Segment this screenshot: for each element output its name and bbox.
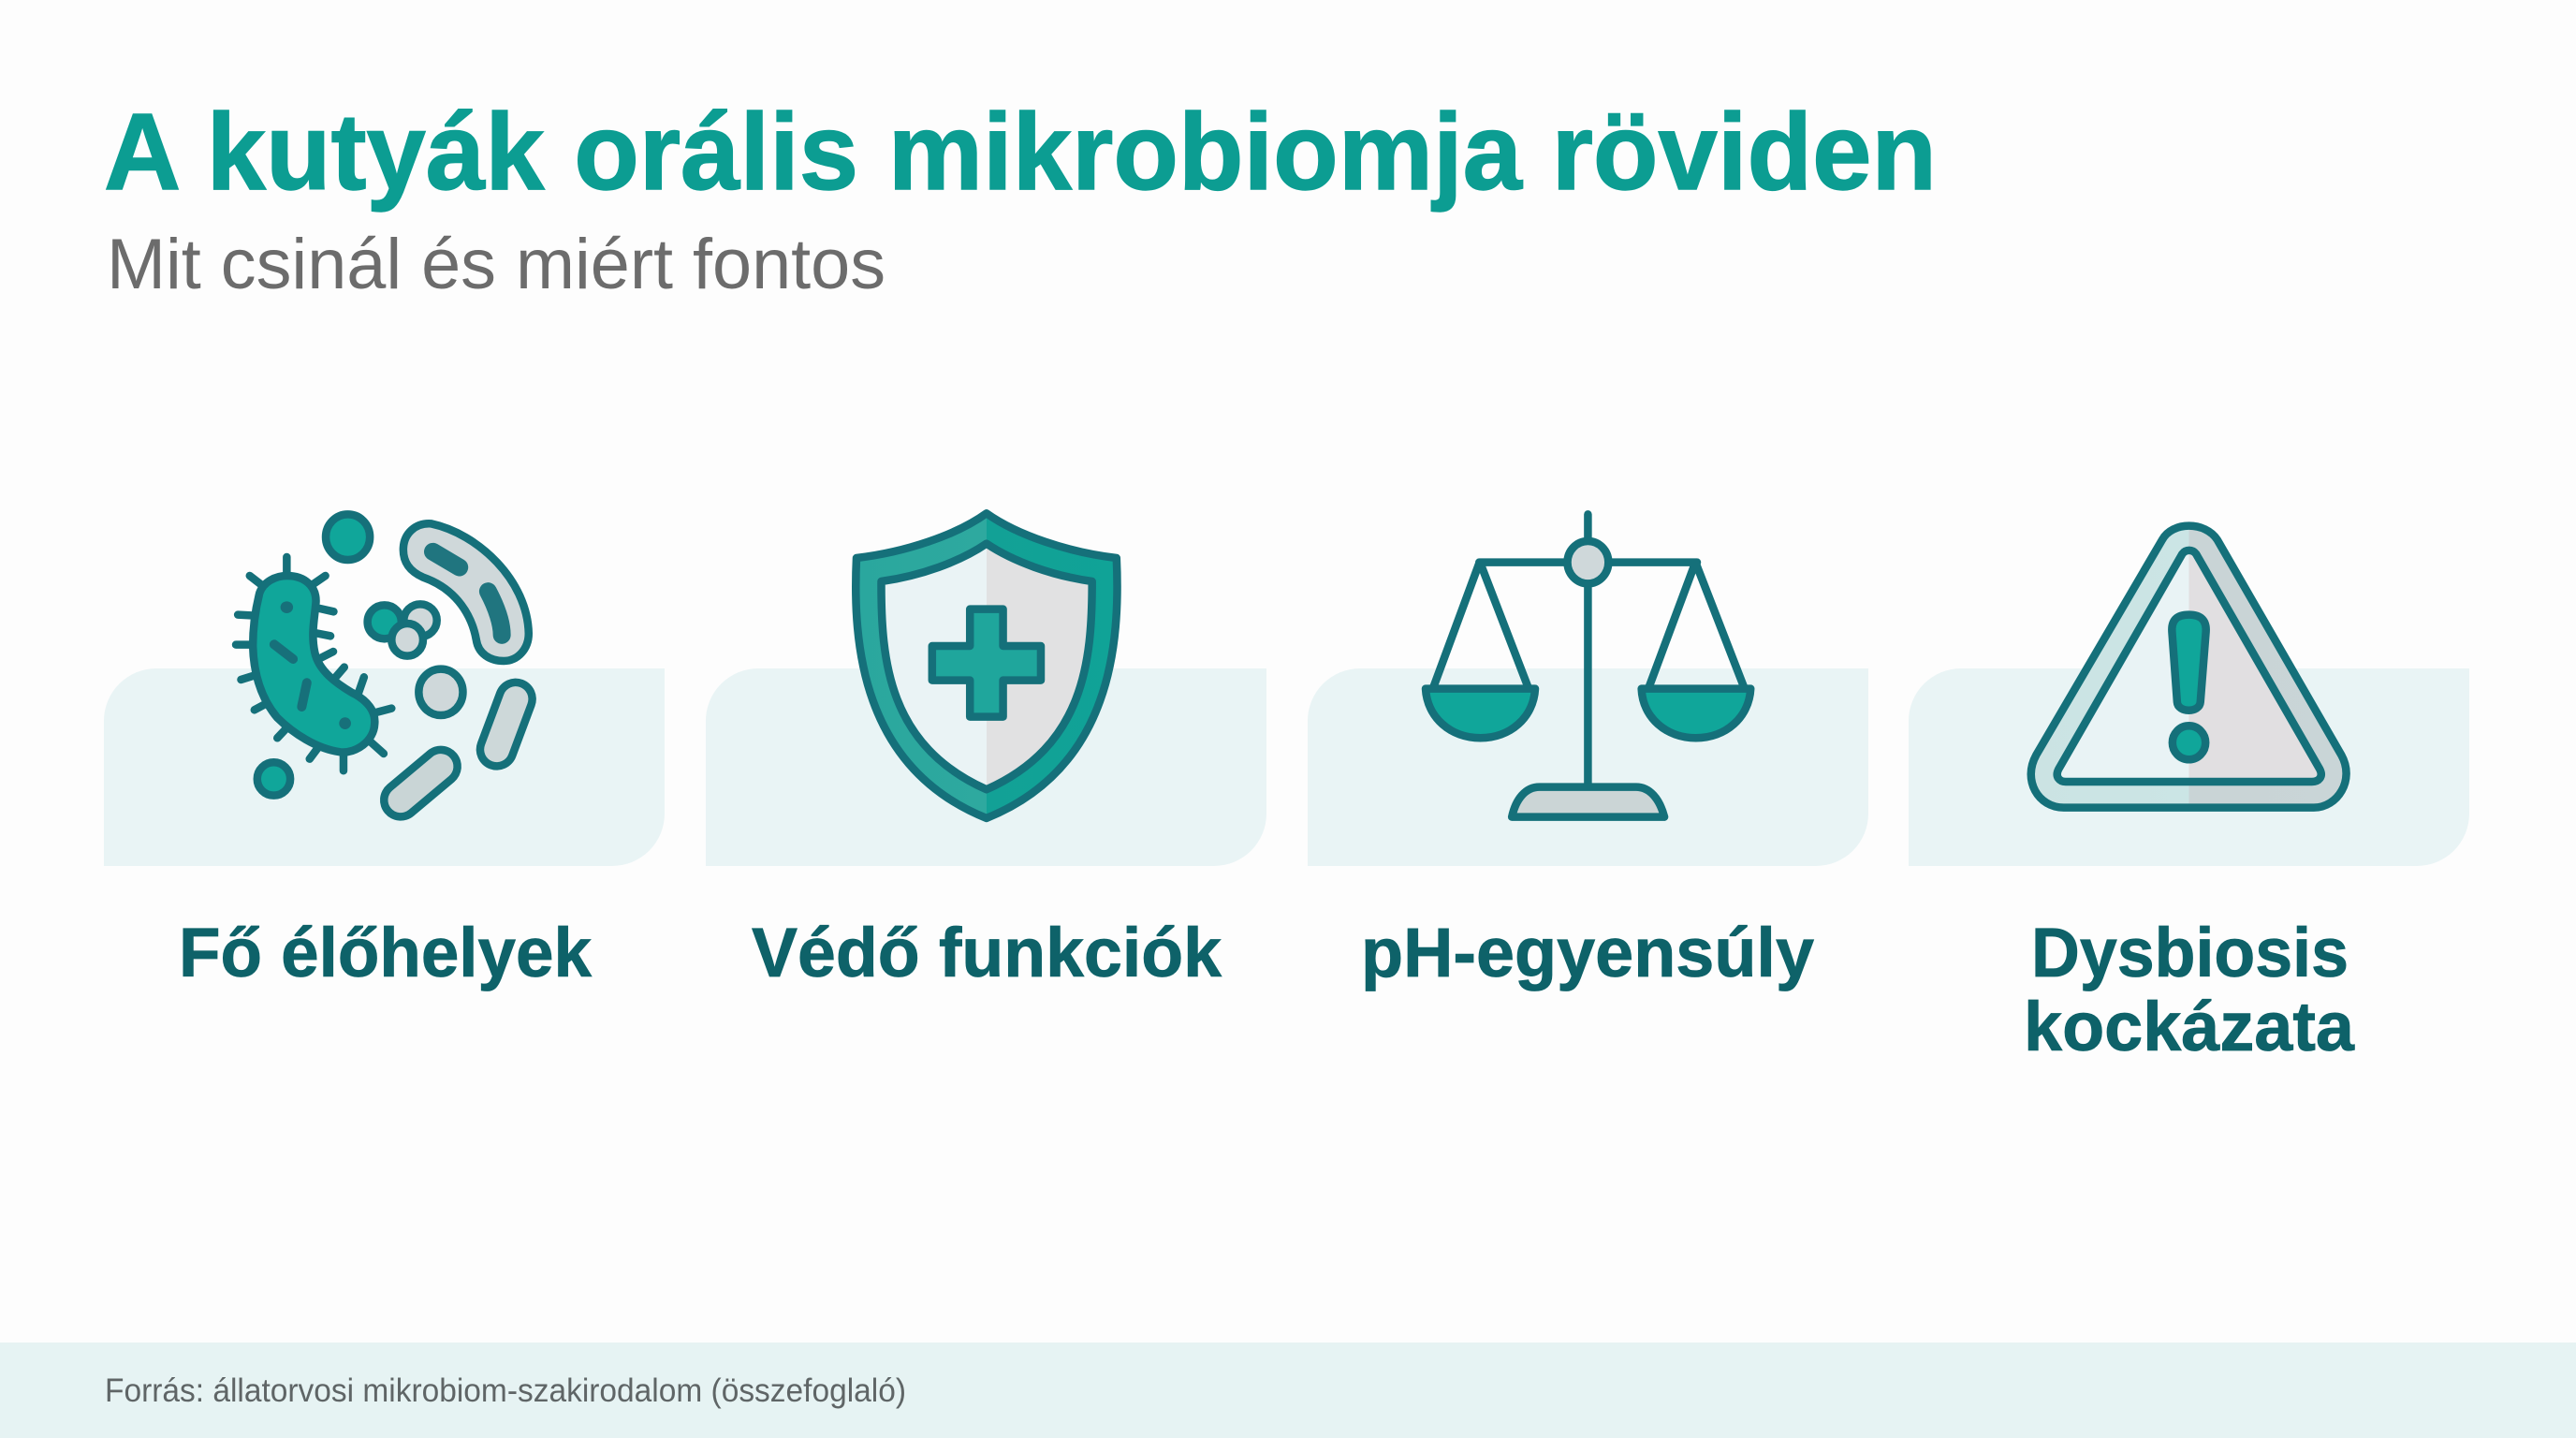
panel: Fő élőhelyek <box>104 514 665 991</box>
left pan <box>1426 689 1535 738</box>
base <box>1512 787 1664 817</box>
footer band <box>0 1343 2576 1438</box>
body markings <box>274 601 351 729</box>
teal coccus bottom <box>257 762 290 796</box>
scale frame <box>1433 514 1745 786</box>
subtitle: Mit csinál és miért fontos <box>107 225 886 304</box>
gray coccus <box>418 669 462 715</box>
label: Fő élőhelyek: Fő élőhelyek <box>179 914 593 991</box>
capsule bottom <box>401 767 441 800</box>
label: Dysbiosis kockázata: Dysbiosis <box>2031 914 2349 991</box>
panel background 3 <box>1308 668 1868 866</box>
icon: warning triangle <box>2031 526 2347 808</box>
icon: bacteria <box>236 514 529 800</box>
panel: pH-egyensúly <box>1308 514 1868 991</box>
footer background <box>0 1343 2576 1438</box>
label: pH-egyensúly: pH-egyensúly <box>1361 914 1814 991</box>
hub <box>1568 541 1608 583</box>
triangle rim <box>2031 526 2347 808</box>
coccus cluster <box>368 604 437 656</box>
source note: Forrás: állatorvosi mikrobiom-szakirodalom (összefoglaló) <box>105 1372 906 1409</box>
label: Védő funkciók: Védő funkciók <box>752 914 1222 991</box>
curved bean bacterium <box>403 523 529 661</box>
panel background 2 <box>706 668 1266 866</box>
bean markings <box>432 551 502 635</box>
title: A kutyák orális mikrobiomja röviden <box>104 91 1937 213</box>
medical cross <box>932 609 1041 717</box>
panel background 4 <box>1909 668 2469 866</box>
panel: Védő funkciók <box>706 513 1266 991</box>
exclamation dot <box>2173 726 2205 759</box>
shield inner <box>881 544 1092 789</box>
teal coccus top <box>326 514 370 560</box>
icon: shield <box>856 513 1118 818</box>
label: Dysbiosis kockázata: kockázata <box>2024 988 2355 1065</box>
right pan <box>1642 689 1750 738</box>
rod bacterium body <box>253 576 374 752</box>
triangle inner <box>2057 550 2321 782</box>
icon: balance scale <box>1426 514 1750 817</box>
exclamation bar <box>2172 615 2206 711</box>
spikes <box>236 557 391 770</box>
shield rim <box>856 513 1118 818</box>
panel background 1 <box>104 668 665 866</box>
panel: Dysbiosis kockázata <box>1909 526 2469 1065</box>
capsule right <box>497 699 516 750</box>
